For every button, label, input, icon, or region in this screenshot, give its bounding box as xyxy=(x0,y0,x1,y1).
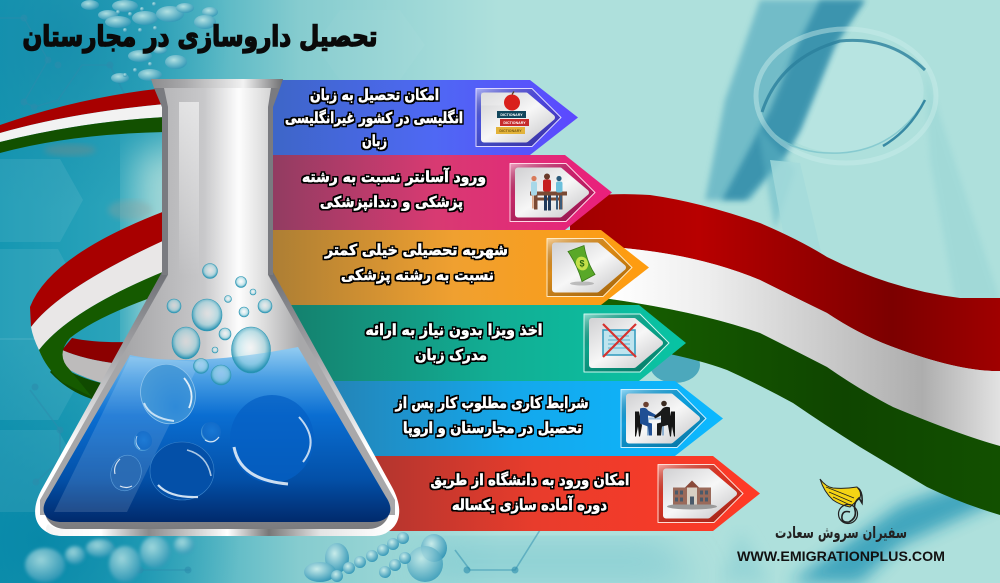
logo xyxy=(737,479,945,564)
liquid sheen xyxy=(54,357,200,512)
arrow 4: visa without language certificate xyxy=(260,305,686,381)
text 5: شرایط کاری مطلوب کار پس از xyxy=(395,394,588,413)
liquid xyxy=(44,347,390,522)
hexagon pattern xyxy=(0,10,540,574)
icon panel 4 xyxy=(584,314,669,372)
text 3: شهریه تحصیلی خیلی کمتر xyxy=(324,241,508,259)
icon panel 2 xyxy=(510,164,595,222)
text 4 xyxy=(366,321,542,364)
text 2: پزشکی و دندانپزشکی xyxy=(320,193,463,212)
icon panel 3: $ xyxy=(579,258,585,268)
flask rim xyxy=(151,79,283,88)
text 6: دوره آماده سازی یکساله xyxy=(452,496,607,514)
arrow 6: university via preparatory course xyxy=(260,456,760,531)
ribbon: left outer loop back band xyxy=(50,338,130,400)
flask shoulder interior xyxy=(40,275,395,515)
bubbles in liquid xyxy=(106,357,314,500)
text 2 xyxy=(302,168,486,212)
ribbon: left front band xyxy=(30,211,165,397)
icon panel 6 xyxy=(658,464,743,522)
logo bird xyxy=(820,479,862,524)
text 3 xyxy=(324,241,508,285)
text 2: ورود آسانتر نسبت به رشته xyxy=(302,168,486,186)
flask outer glass xyxy=(35,79,399,536)
text 5: تحصیل در مجارستان و اروپا xyxy=(403,419,582,438)
text 3: نسبت به رشته پزشکی xyxy=(341,266,494,285)
text 1: انگلیسی در کشور غیرانگلیسی xyxy=(285,109,463,127)
test tube background xyxy=(650,0,1000,383)
molecule bottom xyxy=(25,532,447,582)
arrow 1: English-language study xyxy=(260,80,578,155)
flask inner ring xyxy=(44,100,390,529)
logo Persian name: سفیران سروش سعادت xyxy=(775,523,907,542)
flask xyxy=(35,79,399,536)
icon panel 1: DICTIONARY xyxy=(499,129,522,133)
text 6 xyxy=(430,471,630,514)
text 4: اخذ ویزا بدون نیاز به ارائه xyxy=(366,321,542,339)
ribbon: right band xyxy=(570,194,1000,515)
flask neck interior xyxy=(164,88,271,280)
text 5 xyxy=(395,394,588,438)
arrow 5: work conditions xyxy=(260,381,723,456)
icon panel 3 xyxy=(547,238,632,296)
flask neck frame xyxy=(154,88,280,275)
text 4: مدرک زبان xyxy=(415,346,487,364)
title: تحصیل داروسازی در مجارستان xyxy=(22,20,378,53)
text 6: امکان ورود به دانشگاه از طریق xyxy=(430,471,630,489)
flask bottom metallic strip xyxy=(46,524,389,536)
text 1: زبان xyxy=(362,132,387,150)
icon panel 5 xyxy=(621,390,706,448)
icon panel 1: DICTIONARY xyxy=(500,113,523,117)
text 1: امکان تحصیل به زبان xyxy=(310,86,439,104)
icon panel 1 xyxy=(476,88,561,146)
arrow 2: easier admission xyxy=(260,155,612,230)
icon panel 1: DICTIONARY xyxy=(503,121,526,125)
text 1 xyxy=(285,86,463,150)
arrow 3: lower tuition xyxy=(260,230,649,305)
molecule top xyxy=(81,0,218,83)
website url: WWW.EMIGRATIONPLUS.COM xyxy=(737,548,945,564)
bubbles above liquid xyxy=(167,264,272,385)
ribbon: top left band xyxy=(0,88,165,153)
